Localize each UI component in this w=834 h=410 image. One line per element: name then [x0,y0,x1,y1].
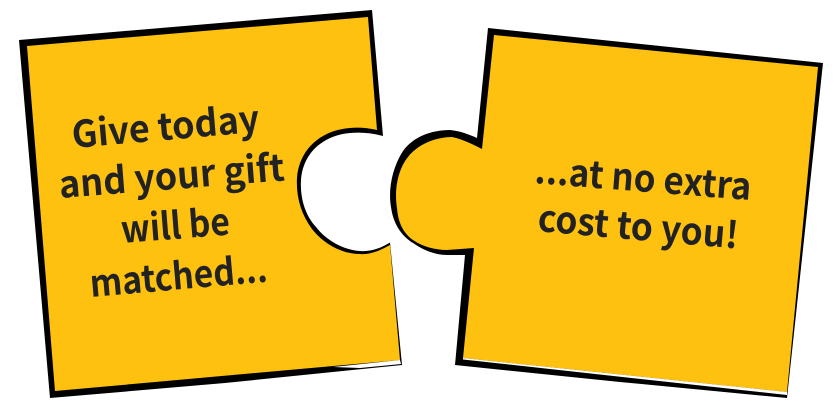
panel: left puzzle piece [19,10,402,398]
panel: right puzzle piece [390,28,823,398]
text: will be: will be [119,192,232,254]
white sliver on bottom edge [463,358,787,395]
piece outline [19,10,402,398]
text: and your gift: and your gift [57,137,286,209]
piece fill [396,35,818,392]
text: matched: matched... [87,239,269,308]
text: cost to you: cost to you! [536,188,741,259]
text: give today: Give today [69,89,261,159]
white sliver on bottom edge [333,360,401,368]
piece fill [27,17,400,391]
piece outline [390,28,823,398]
text: at no extra: ...at no extra [533,140,754,211]
